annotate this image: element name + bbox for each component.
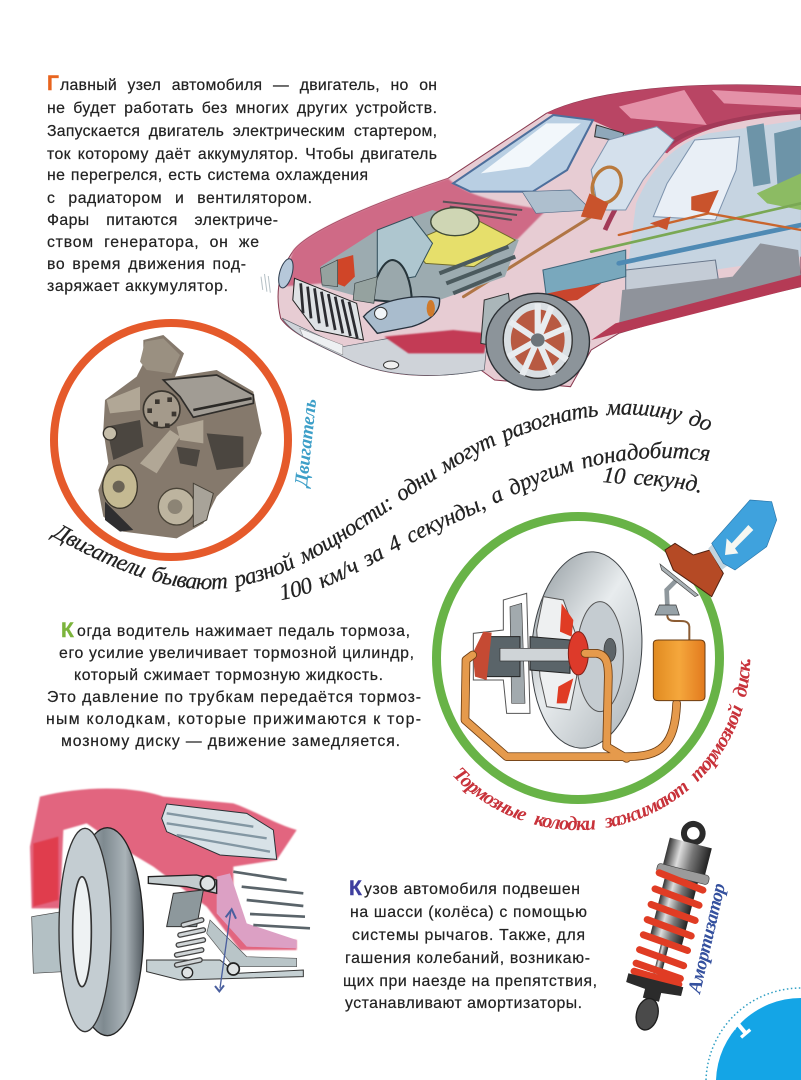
- suspension paragraph: узов автомобиля подвешен: [364, 881, 580, 898]
- arrowheads: [215, 909, 236, 991]
- block light patches: [107, 387, 203, 473]
- interior: [626, 120, 801, 283]
- upper arm: [148, 875, 217, 893]
- blue circle: [716, 998, 801, 1080]
- intro paragraph: с радиатором и вентилятором.: [47, 190, 312, 207]
- front wheel: [486, 293, 589, 390]
- manifold: [439, 247, 515, 293]
- pedal lever: [667, 580, 677, 605]
- handwritten note on engine power: 10 секунд.: [602, 468, 700, 493]
- master cylinder: [653, 640, 705, 701]
- label: shock absorber: Амортизатор: [684, 881, 730, 996]
- rim: [503, 302, 572, 378]
- headlight orange marker: [427, 300, 435, 317]
- fan hub: [168, 499, 182, 514]
- engine photo: [98, 335, 262, 538]
- orange pipe: [619, 213, 801, 235]
- handwritten note on engine power: Двигатели бывают разной мощности: одни могут разогнать машину до: [48, 404, 711, 592]
- upper cylinder: [663, 838, 712, 876]
- collar: [656, 863, 710, 885]
- steering column: [464, 217, 591, 297]
- orange drop cap: Г: [47, 72, 59, 95]
- alternator fan: [158, 488, 195, 525]
- lower intake slats: [233, 872, 310, 928]
- page number: 1: [728, 1014, 755, 1044]
- grey sill: [32, 912, 63, 973]
- disc red: [511, 309, 565, 371]
- intro paragraph: не перегрелся, есть система охлаждения: [47, 167, 368, 184]
- spring highlights: [177, 920, 203, 965]
- left headlight: [276, 257, 296, 289]
- green pipe: [591, 203, 801, 252]
- rear pillar and seat: [746, 123, 801, 187]
- mirror: [595, 125, 624, 142]
- arrow shaft: [220, 912, 231, 988]
- hub hole: [604, 638, 616, 662]
- brake paragraph: мозному диску — движение замедляется.: [61, 733, 400, 750]
- brake paragraph: ным колодкам, которые прижимаются к тор-: [46, 711, 421, 728]
- timing cover: [372, 260, 412, 303]
- cover ribs: [193, 398, 252, 410]
- caliper white outline right: [537, 597, 577, 710]
- steering wheel: [587, 163, 626, 207]
- wheel hub: [577, 602, 623, 712]
- grille: [293, 278, 364, 340]
- red fender shade: [33, 837, 58, 907]
- caliper inner grey: [510, 603, 525, 703]
- top eye: [682, 822, 705, 845]
- reservoir feed pipe: [667, 616, 689, 640]
- alternator body: [193, 483, 213, 527]
- intro paragraph: Запускается двигатель электрическим стартером,: [47, 123, 437, 140]
- pipes outline: [465, 653, 677, 758]
- fog lamp: [384, 361, 399, 369]
- pulley holes: [147, 397, 176, 428]
- pink lower panel: [217, 873, 297, 948]
- timing pulley: [143, 391, 180, 428]
- left piston: [487, 637, 570, 677]
- green drop cap: К: [61, 619, 74, 642]
- crank hub: [113, 481, 125, 493]
- lower joint right: [227, 963, 239, 975]
- intro paragraph: ток которому даёт аккумулятор. Чтобы двигатель: [47, 146, 437, 163]
- label: engine: Двигатель: [291, 397, 321, 490]
- engine bay: [320, 210, 519, 300]
- firewall slats: [443, 202, 522, 220]
- tire front: [59, 828, 111, 1032]
- boot: [665, 543, 723, 597]
- brake pipes: [465, 616, 689, 758]
- intro paragraph: [47, 72, 437, 295]
- pedal base: [655, 605, 679, 615]
- orange ring: [54, 323, 288, 557]
- air filter: [431, 208, 479, 236]
- bottom mount: [633, 996, 661, 1032]
- page number badge: [706, 988, 801, 1080]
- headlight: [162, 804, 277, 859]
- carburettor top: [140, 338, 180, 373]
- pipes fill: [465, 653, 677, 758]
- suspension paragraph: щих при наезде на препятствия,: [343, 973, 597, 990]
- bumper red band: [384, 330, 488, 353]
- oil pan: [105, 502, 133, 532]
- passenger seat back: [591, 127, 674, 210]
- lower frame: [147, 960, 303, 980]
- pedal plate: [660, 564, 698, 597]
- headlight: [364, 297, 440, 333]
- lower plate: [623, 973, 683, 1007]
- blue leg: [712, 500, 777, 570]
- brake paragraph: который сжимает тормозную жидкость.: [74, 667, 383, 684]
- coil spring: [634, 873, 704, 984]
- left red cap: [473, 632, 492, 680]
- rear green parts: [757, 173, 801, 210]
- floor: [619, 243, 801, 327]
- tensioner pulley: [103, 427, 117, 440]
- caption: brake pads: Тормозные колодки зажимают тормозной диск.: [453, 659, 750, 830]
- spokes: [508, 303, 569, 375]
- sill: [591, 275, 801, 340]
- shock absorber: [616, 817, 723, 1037]
- suspension paragraph: гашения колебаний, возникаю-: [345, 950, 590, 967]
- steering knuckle: [167, 890, 203, 927]
- hood: [281, 178, 546, 297]
- intro paragraph: не будет работать без многих других устройств.: [47, 100, 437, 117]
- dark crevices: [107, 420, 243, 470]
- transmission tunnel: [543, 250, 626, 297]
- brake parts: [496, 283, 602, 353]
- brake paragraph: Это давление по трубкам передаётся тормоз-: [47, 689, 421, 706]
- cylinder head: [408, 217, 515, 267]
- hub: [531, 333, 545, 347]
- brake disc: [525, 548, 648, 752]
- suspension paragraph: на шасси (колёса) с помощью: [350, 904, 587, 921]
- shafts and pipes: [464, 163, 801, 297]
- red pads: [557, 603, 573, 703]
- brake diagram: [436, 500, 777, 800]
- engine block: [377, 217, 432, 283]
- radiator: [320, 260, 377, 303]
- radiator red part: [336, 255, 355, 287]
- dashboard: [522, 190, 591, 213]
- tire back: [71, 828, 143, 1036]
- lower arm: [207, 920, 297, 967]
- headlight stripes: [167, 813, 270, 852]
- intro paragraph: во время движения под-: [47, 256, 246, 273]
- suspension illustration: [30, 789, 310, 1036]
- door pillar: [605, 112, 801, 230]
- suspension paragraph: устанавливают амортизаторы.: [345, 995, 582, 1012]
- intro paragraph: заряжает аккумулятор.: [47, 278, 228, 295]
- upper joint: [200, 876, 215, 891]
- inner cylinder: [649, 874, 698, 947]
- sock: [708, 540, 728, 570]
- bumper: [282, 318, 488, 375]
- intro paragraph: лавный узел автомобиля — двигатель, но он: [60, 77, 437, 94]
- suspension paragraph: [343, 877, 597, 1012]
- handwritten note on engine power: 100 км/ч за 4 секунды, а другим понадобится: [281, 441, 710, 600]
- grille bars: [301, 283, 357, 338]
- down arrow on leg: [725, 525, 753, 555]
- coil spring: [177, 920, 203, 965]
- suspension paragraph: системы рычагов. Также, для: [352, 927, 585, 944]
- travel arrow: [215, 909, 236, 991]
- suspension strut: [481, 293, 512, 347]
- brake paragraph: огда водитель нажимает педаль тормоза,: [77, 623, 410, 640]
- roof: [546, 85, 801, 153]
- crank pulley: [103, 465, 137, 508]
- tire: [486, 293, 589, 390]
- car cutaway illustration: [261, 85, 801, 390]
- seat cushion: [626, 260, 719, 297]
- windshield: [453, 115, 593, 192]
- number plate: [300, 328, 343, 355]
- wheel rim: [73, 877, 91, 987]
- front seat: [653, 137, 740, 220]
- motion lines: [261, 274, 270, 293]
- caliper shaft: [500, 648, 570, 661]
- windshield glare: [481, 123, 581, 173]
- headlight lenses: [375, 307, 387, 319]
- caliper white outline: [473, 593, 530, 713]
- right red cap: [568, 632, 588, 675]
- dotted ring: [706, 988, 801, 1080]
- red steering mechanism: [581, 190, 719, 230]
- car body: [278, 85, 801, 387]
- blue propeller shaft: [619, 225, 801, 263]
- lower joints: [182, 967, 193, 978]
- intro paragraph: Фары питаются электриче-: [47, 212, 278, 229]
- intro paragraph: ством генератора, он же: [47, 234, 259, 251]
- blue drop cap: К: [349, 877, 362, 900]
- brake paragraph: [46, 619, 421, 750]
- engine photo circle: [54, 323, 288, 557]
- green ring: [436, 516, 720, 800]
- sunroof highlights: [619, 90, 801, 125]
- red car body: [30, 789, 297, 950]
- engine silhouette: [98, 335, 262, 538]
- valve cover: [163, 375, 253, 417]
- piston rod: [652, 942, 669, 981]
- brake paragraph: его усилие увеличивает тормозной цилиндр,: [59, 645, 414, 662]
